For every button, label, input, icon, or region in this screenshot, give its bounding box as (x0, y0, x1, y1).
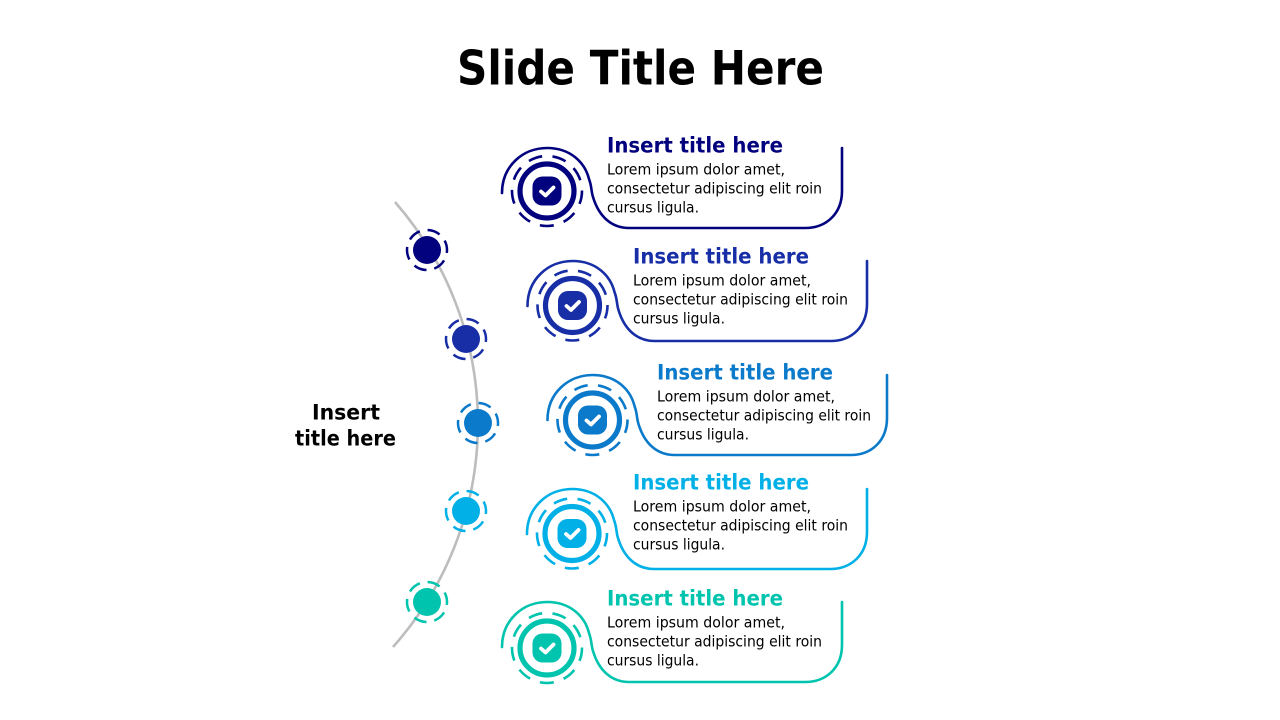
central label (295, 400, 396, 450)
panel outline 5 (502, 602, 842, 682)
panel: item 3 (548, 360, 887, 455)
item 4 title: Insert title here (633, 470, 809, 496)
item 1 text: Lorem ipsum dolor amet, (607, 160, 785, 178)
item 1 text: cursus ligula. (607, 198, 699, 216)
item 4 text: consectetur adipiscing elit roin (633, 516, 848, 534)
item 5 text: consectetur adipiscing elit roin (607, 632, 822, 650)
item 5 title: Insert title here (607, 586, 783, 612)
item 1 text: consectetur adipiscing elit roin (607, 180, 822, 198)
item 1 text (607, 160, 822, 216)
item 1 title: Insert title here (607, 134, 783, 158)
timeline marker 5 (407, 582, 447, 622)
timeline marker 4 (446, 491, 486, 531)
icon: check badge 1 (512, 156, 582, 226)
item 2 title: Insert title here (633, 244, 809, 270)
item 3 text: consectetur adipiscing elit roin (657, 406, 871, 424)
item 4 text: Lorem ipsum dolor amet, (633, 498, 811, 516)
panel outline 1 (502, 148, 842, 228)
item 5 text (607, 614, 822, 670)
item 2 text: Lorem ipsum dolor amet, (633, 272, 811, 290)
panel outline 2 (528, 261, 867, 341)
item 4 text (633, 498, 848, 554)
item 2 text (633, 272, 848, 328)
icon: check badge 4 (537, 498, 607, 568)
icon: check badge 3 (558, 385, 628, 455)
panel: item 4 (527, 470, 867, 569)
panel outline 4 (527, 489, 867, 569)
item 3 text (657, 388, 871, 444)
central label: title here (295, 426, 396, 450)
icon: check badge 5 (512, 613, 582, 683)
item 3 text: cursus ligula. (657, 426, 749, 444)
panel outline 3 (548, 375, 887, 455)
item 3 text: Lorem ipsum dolor amet, (657, 388, 835, 406)
item 2 text: consectetur adipiscing elit roin (633, 290, 848, 308)
item 2 text: cursus ligula. (633, 310, 725, 328)
item 5 text: Lorem ipsum dolor amet, (607, 614, 785, 632)
title: Slide Title Here (457, 42, 824, 96)
timeline marker 1 (407, 230, 447, 270)
central label: Insert (312, 400, 380, 424)
icon: check badge 2 (538, 270, 608, 340)
timeline marker 2 (446, 319, 486, 359)
item 4 text: cursus ligula. (633, 536, 725, 554)
item 5 text: cursus ligula. (607, 652, 699, 670)
panel: item 1 (502, 134, 842, 228)
panel: item 5 (502, 586, 842, 683)
item 3 title: Insert title here (657, 360, 833, 386)
panel: item 2 (528, 244, 867, 341)
timeline curve (393, 202, 478, 647)
timeline marker 3 (458, 403, 498, 443)
